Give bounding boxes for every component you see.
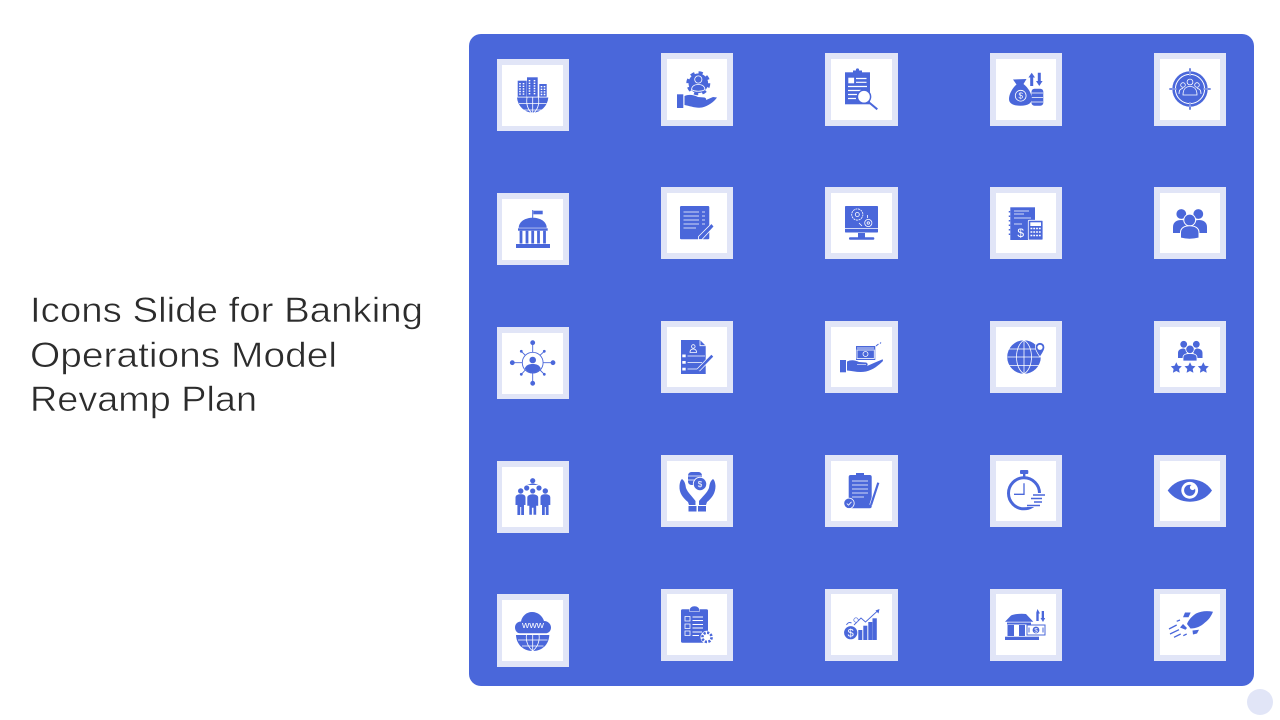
icon: government building with flag	[497, 193, 569, 265]
icon: checklist clipboard with gear	[661, 589, 733, 661]
icon: globe with location pin	[990, 321, 1062, 393]
icon: target with people	[1154, 53, 1226, 126]
icon: clipboard with magnifier	[825, 53, 898, 126]
icon: www cloud over globe	[497, 594, 569, 667]
icon: www cloud over globe: www	[521, 620, 545, 630]
icon: team with three stars	[1154, 321, 1226, 393]
icon: group of people standing	[497, 461, 569, 533]
title: Icons Slide for Banking	[30, 290, 423, 330]
panel: icon grid background	[469, 34, 1254, 686]
icon: bank with cash and transfer arrows	[990, 589, 1062, 661]
icon: team of three people	[1154, 187, 1226, 259]
icon: dollar coin with growth bars: $	[848, 628, 854, 640]
icon: profile form with pen	[661, 321, 733, 393]
icon: hand offering cash	[825, 321, 898, 393]
icon: hands holding coins: $	[698, 480, 703, 489]
icon: monitor with gears	[825, 187, 898, 259]
icon: hand holding gear with person	[661, 53, 733, 126]
icon: stopwatch with speed lines	[990, 455, 1062, 527]
decorative page circle	[1247, 689, 1273, 715]
icon: dollar coin with growth bars	[825, 589, 898, 661]
icon: city buildings on globe	[497, 59, 569, 131]
icon: money bag with coins and arrows: $	[1018, 92, 1023, 101]
icon: money bag with coins and arrows	[990, 53, 1062, 126]
icon: signed clipboard with pen	[825, 455, 898, 527]
icon: person network hub	[497, 327, 569, 399]
title: Operations Model	[30, 335, 337, 375]
title	[30, 290, 423, 419]
icon: hands holding coins	[661, 455, 733, 527]
icon: eye	[1154, 455, 1226, 527]
icon: document with pencil	[661, 187, 733, 259]
icon: notebook with calculator: $	[1017, 226, 1024, 240]
icon: notebook with calculator	[990, 187, 1062, 259]
title: Revamp Plan	[30, 379, 257, 419]
icon: bank with cash and transfer arrows: $	[1034, 628, 1038, 634]
icon: rocket	[1154, 589, 1226, 661]
